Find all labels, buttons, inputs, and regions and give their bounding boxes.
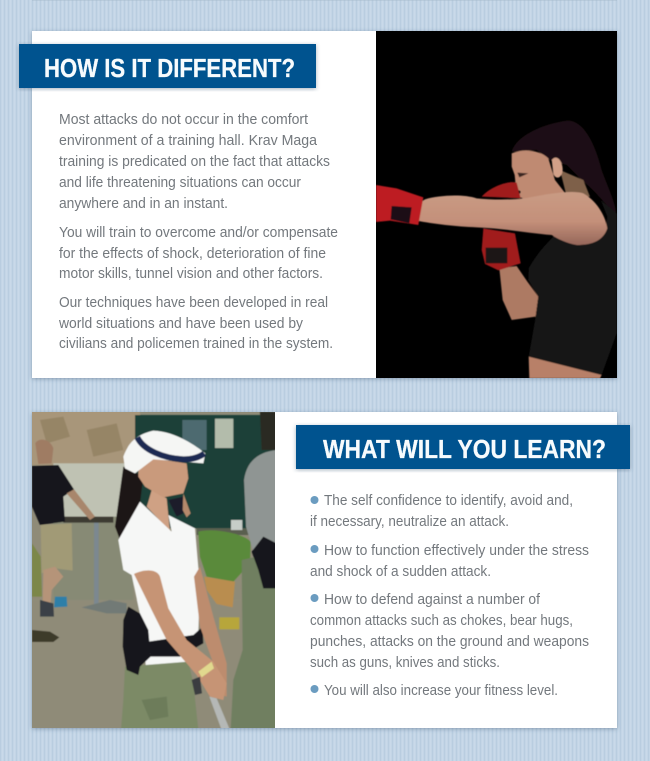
text block: training intro: Most attacks do not occur in the comfort — [59, 112, 308, 128]
heading banner: what will you learn: WHAT WILL YOU LEARN? — [323, 434, 606, 464]
text block: training intro: environment of a training hall. Krav Maga — [59, 133, 318, 149]
text block: training intro: and life threatening situations can occur — [59, 175, 301, 191]
text block: compensation: motor skills, tunnel vision and other factors. — [59, 266, 323, 282]
text block: compensation — [59, 225, 338, 282]
bullet: function under stress — [310, 543, 589, 580]
bullet: defend against attacks: How to defend against a number of — [324, 592, 541, 608]
man at right edge — [231, 412, 277, 730]
woman — [115, 431, 230, 730]
bullet: self confidence: if necessary, neutralize an attack. — [310, 514, 509, 530]
text block: training intro: training is predicated on the fact that attacks — [59, 154, 330, 170]
heading banner: how is it different — [19, 44, 316, 88]
bullet: defend against attacks — [310, 592, 589, 671]
bullet: defend against attacks: common attacks such as chokes, bear hugs, — [310, 613, 573, 629]
bullet: self confidence: The self confidence to identify, avoid and, — [324, 493, 573, 509]
text block: real world techniques: Our techniques have been developed in real — [59, 295, 328, 311]
panel: how is it different — [19, 31, 617, 378]
bullet: defend against attacks: punches, attacks on the ground and weapons — [310, 634, 589, 650]
bullet: function under stress: How to function effectively under the stress — [324, 543, 589, 559]
text block: training intro — [59, 112, 330, 212]
text block: real world techniques: civilians and policemen trained in the system. — [59, 336, 333, 352]
heading banner: how is it different: HOW IS IT DIFFERENT? — [44, 53, 295, 83]
text block: real world techniques: world situations and have been used by — [58, 316, 304, 332]
man in glock t-shirt — [32, 440, 95, 642]
text block: training intro: anywhere and in an instant. — [59, 196, 228, 212]
panel: what will you learn — [30, 410, 630, 730]
bullet: defend against attacks: such as guns, knives and sticks. — [310, 655, 500, 671]
photo: woman at shooting range — [30, 410, 277, 730]
text block: compensation: You will train to overcome and/or compensate — [59, 225, 338, 241]
photo: woman boxer punching — [376, 31, 617, 378]
heading banner: what will you learn — [296, 425, 630, 469]
bullet: function under stress: and shock of a sudden attack. — [310, 564, 491, 580]
bullet: fitness level: You will also increase your fitness level. — [324, 683, 558, 699]
bullet: self confidence — [310, 493, 573, 530]
text block: compensation: for the effects of shock, deterioration of fine — [59, 246, 326, 262]
text block: real world techniques — [58, 295, 333, 352]
